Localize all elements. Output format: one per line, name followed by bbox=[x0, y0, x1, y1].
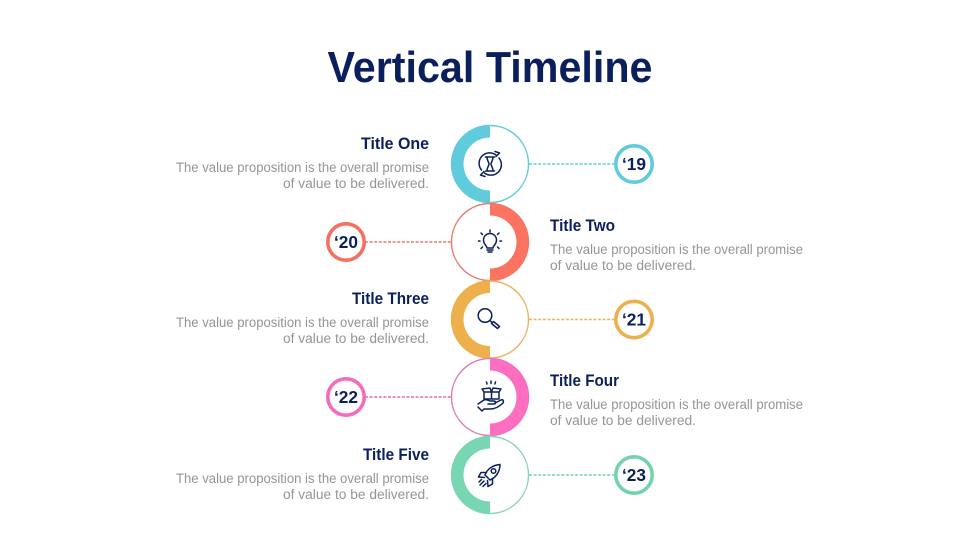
connector: step 4 bbox=[365, 396, 451, 398]
text block: Title Four bbox=[550, 372, 803, 428]
text block: Title Three: Title Three bbox=[352, 290, 429, 308]
text block: Title One: The value proposition is the overall promise bbox=[176, 160, 429, 175]
year badge: 22: ‘22 bbox=[334, 387, 358, 407]
connector: step 5 bbox=[529, 474, 615, 476]
text block: Title One: Title One bbox=[361, 135, 429, 153]
step 5: Title Five bbox=[176, 436, 652, 514]
node: step 3 ring bbox=[451, 280, 528, 358]
node: step 1 ring bbox=[451, 125, 528, 203]
year badge: 23 bbox=[616, 457, 652, 493]
text block: Title Two: Title Two bbox=[550, 217, 615, 235]
icon: light bulb bbox=[478, 230, 502, 252]
icon: rocket bbox=[478, 464, 500, 486]
step 1: Title One bbox=[176, 125, 652, 203]
text block: Title Four: of value to be delivered. bbox=[550, 413, 696, 428]
icon: box on open hand bbox=[478, 381, 503, 411]
year badge: 20: ‘20 bbox=[334, 232, 358, 252]
year badge: 19: ‘19 bbox=[622, 154, 646, 174]
icon: hourglass cycle bbox=[479, 152, 501, 176]
text block: Title Five: of value to be delivered. bbox=[283, 487, 429, 502]
icon: magnifying glass bbox=[478, 309, 500, 328]
text block: Title Three: The value proposition is the overall promise bbox=[176, 315, 429, 330]
text block: Title One: of value to be delivered. bbox=[283, 176, 429, 191]
step 2: Title Two bbox=[328, 203, 803, 281]
text block: Title Five: The value proposition is the overall promise bbox=[176, 471, 429, 486]
year badge: 19 bbox=[616, 146, 652, 182]
text block: Title Two: of value to be delivered. bbox=[550, 258, 696, 273]
node: step 5 ring bbox=[451, 436, 528, 514]
year badge: 20 bbox=[328, 224, 364, 260]
node: step 4 ring bbox=[452, 358, 529, 436]
year badge: 22 bbox=[328, 379, 364, 415]
text block: Title Five: Title Five bbox=[363, 446, 429, 464]
text block: Title Five bbox=[176, 446, 429, 502]
connector: step 3 bbox=[529, 318, 615, 320]
node: step 2 ring bbox=[452, 203, 529, 281]
text block: Title Two bbox=[550, 217, 803, 273]
text block: Title Three bbox=[176, 290, 429, 346]
text block: Title Four: The value proposition is the overall promise bbox=[550, 397, 803, 412]
year badge: 23: ‘23 bbox=[622, 465, 646, 485]
step 4: Title Four bbox=[328, 358, 803, 436]
text block: Title One bbox=[176, 135, 429, 191]
text block: Title Two: The value proposition is the overall promise bbox=[550, 242, 803, 257]
step 3: Title Three bbox=[176, 280, 652, 358]
year badge: 21: ‘21 bbox=[622, 310, 646, 330]
connector: step 2 bbox=[365, 241, 451, 243]
text block: Title Three: of value to be delivered. bbox=[283, 331, 429, 346]
connector: step 1 bbox=[529, 163, 615, 165]
text block: Title Four: Title Four bbox=[550, 372, 620, 390]
year badge: 21 bbox=[616, 301, 652, 338]
title: Vertical Timeline bbox=[328, 43, 652, 92]
